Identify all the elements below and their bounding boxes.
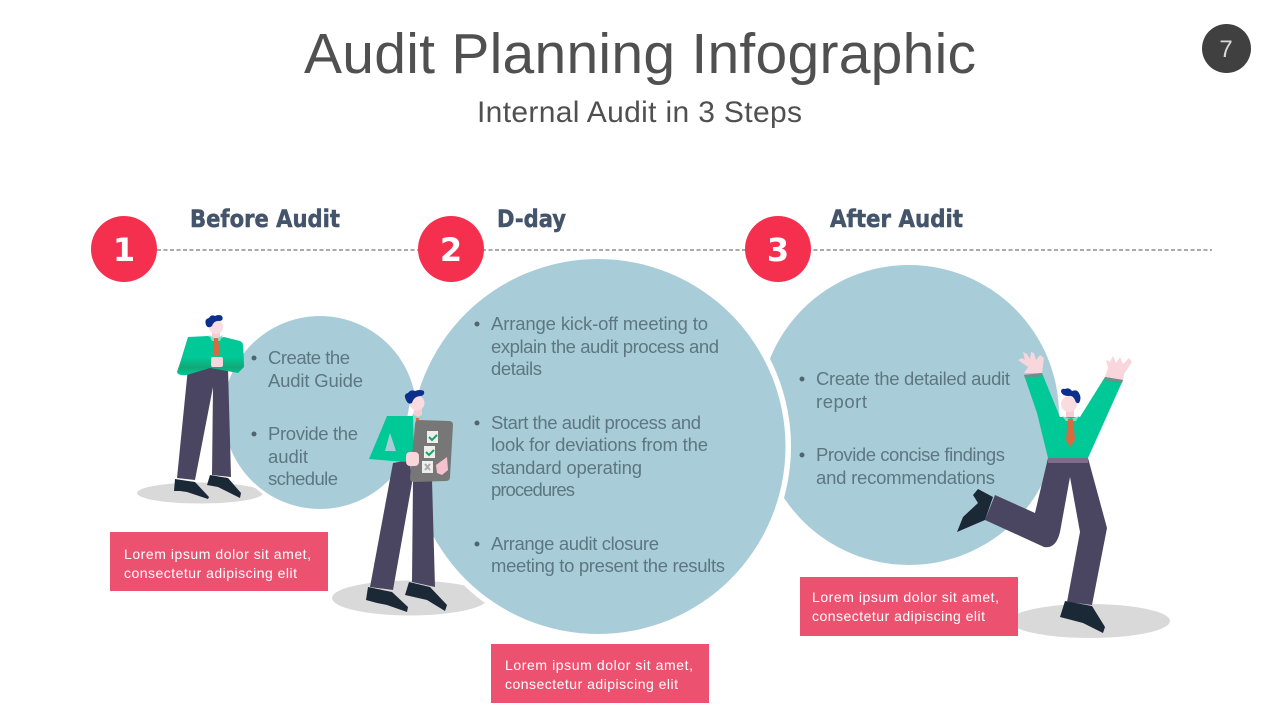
step 1 badge	[91, 216, 157, 282]
text block: d-day bullets	[474, 313, 725, 576]
heading: before audit: Before Audit	[190, 205, 340, 233]
callout: d-day: consectetur adipiscing elit	[505, 676, 678, 692]
text block: after audit bullets: Provide concise findings	[816, 444, 1005, 465]
text block: before audit bullets: Provide the	[268, 423, 358, 444]
step 2 shadow and circle	[332, 254, 791, 640]
text block: before audit bullets: audit	[268, 446, 308, 467]
text block: d-day bullets: Arrange kick-off meeting to	[491, 313, 708, 334]
text block: before audit bullets: schedule	[268, 468, 338, 489]
text block: after audit bullets: Create the detailed audit	[816, 368, 1010, 389]
text block: d-day bullets: procedures	[491, 479, 575, 500]
text block: d-day bullets: look for deviations from the	[491, 434, 708, 455]
heading: d-day: D-day	[497, 205, 566, 233]
text block: before audit bullets	[252, 347, 363, 489]
step 3 badge: 3	[767, 231, 789, 269]
callout: before audit: Lorem ipsum dolor sit amet,	[124, 546, 311, 562]
callout: d-day	[491, 644, 709, 703]
text block: d-day bullets: details	[491, 358, 542, 379]
page number badge: 7	[1219, 36, 1233, 63]
text block: before audit bullets: Audit Guide	[268, 370, 363, 391]
callout: after audit: consectetur adipiscing elit	[812, 608, 985, 624]
text block: d-day bullets: Arrange audit closure	[491, 533, 659, 554]
callout: d-day: Lorem ipsum dolor sit amet,	[505, 657, 693, 673]
callout: after audit	[800, 577, 1018, 636]
subtitle: Internal Audit in 3 Steps	[477, 96, 802, 129]
callout: after audit: Lorem ipsum dolor sit amet,	[812, 589, 999, 605]
text block: before audit bullets: Create the	[268, 347, 350, 368]
text block: after audit bullets: and recommendations	[816, 467, 995, 488]
figure: jumping man	[957, 352, 1132, 633]
step 1 badge: 1	[113, 231, 135, 269]
step 2 badge: 2	[440, 231, 462, 269]
text block: after audit bullets	[800, 368, 1010, 488]
callout: before audit: consectetur adipiscing elit	[124, 565, 297, 581]
text block: d-day bullets: meeting to present the results	[491, 555, 725, 576]
step 2 badge	[418, 216, 484, 282]
text block: d-day bullets: standard operating	[491, 457, 642, 478]
step 3 badge	[745, 216, 811, 282]
page number badge	[1202, 24, 1251, 73]
heading: after audit: After Audit	[830, 205, 963, 233]
text block: d-day bullets: Start the audit process and	[491, 412, 701, 433]
step 3 floor shadow	[1010, 604, 1170, 638]
text block: after audit bullets: report	[816, 391, 867, 412]
figure: man with crossed arms	[174, 315, 244, 499]
figure: man with checklist	[366, 390, 453, 612]
step 3 circle	[759, 265, 1059, 565]
text block: d-day bullets: explain the audit process and	[491, 336, 719, 357]
callout: before audit	[110, 532, 328, 591]
title: Audit Planning Infographic	[304, 22, 976, 86]
step 1 shadow and circle	[137, 313, 420, 512]
